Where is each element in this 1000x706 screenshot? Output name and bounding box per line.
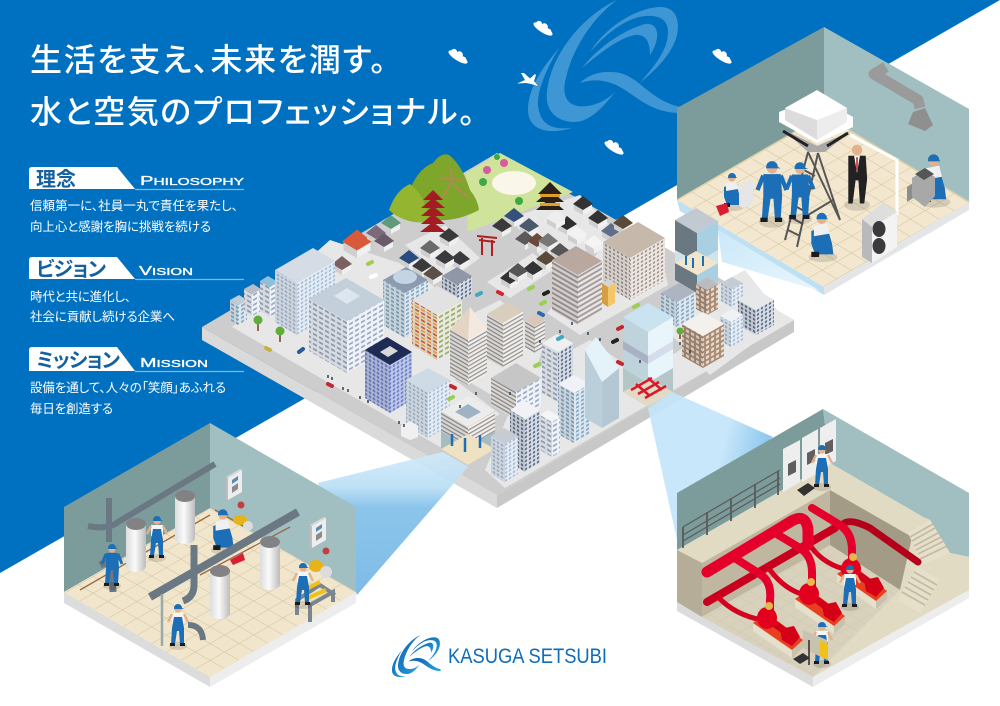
building with pump room cutaway: [623, 303, 673, 407]
panel: philosophy: 理念: [36, 168, 76, 191]
glass tower with open floor: [675, 208, 718, 293]
watermark: large Q logo: [528, 0, 680, 131]
front workers: [168, 563, 313, 650]
pit workers and electric panel: [793, 565, 860, 668]
upper switchboards and worker: [783, 419, 836, 496]
logo: Kasuga Setsubi: [392, 635, 607, 677]
panel: philosophy: P HILOSOPHY: [140, 173, 244, 188]
stairs: [898, 520, 950, 613]
isometric city: [202, 153, 794, 508]
rear pump: [233, 502, 253, 531]
panel: vision: ビジョン: [36, 258, 106, 281]
yellow pipe manifold: [297, 548, 335, 622]
panel: mission: M ISSION: [140, 355, 208, 370]
buildings middle row: [309, 278, 724, 385]
upper grey pipes: [88, 464, 215, 592]
panel: philosophy: 信頼第一に、社員一丸で責任を果たし、: [30, 198, 238, 213]
logo: Kasuga Setsubi: KASUGA SETSUBI: [448, 645, 607, 668]
panel: mission: 毎日を創造する: [30, 401, 113, 416]
rear workers: [102, 509, 237, 590]
title: [30, 42, 475, 130]
copper and grey service lines: [80, 510, 290, 590]
arrow: light beam to pump room: [648, 392, 773, 540]
pagodas: [420, 182, 564, 232]
buildings front row: [365, 334, 619, 443]
panel: mission: 設備を通して、人々の「笑顔」あふれる: [30, 380, 226, 395]
panel: philosophy: 向上心と感謝を胸に挑戦を続ける: [30, 219, 211, 234]
title: 生活を支え、未来を潤す。: [30, 42, 386, 78]
water tanks rear: [126, 490, 195, 572]
building with plant room cutaway: [401, 396, 495, 465]
panel: philosophy: [29, 167, 244, 234]
control panels: [226, 469, 326, 548]
panel: fire pump room: [677, 409, 969, 687]
icon: clouds and plane: [447, 18, 735, 157]
buildings back row: [230, 222, 665, 338]
pumps: [753, 553, 887, 658]
railing: [683, 470, 780, 548]
arrow: light beam to air-conditioning room: [677, 205, 820, 291]
front grey pipes: [150, 512, 298, 640]
panel: plumbing plant room: [64, 423, 356, 687]
service equipment: [716, 168, 935, 216]
wall duct: [874, 67, 933, 131]
white refrigerant pipe: [850, 135, 897, 215]
street cars, trees and pedestrians: [254, 262, 690, 427]
city platform: [202, 153, 794, 508]
red tool box: [230, 553, 245, 565]
outdoor unit: [862, 203, 897, 263]
hill and park: [389, 153, 573, 232]
panel: air-conditioning room: [677, 27, 969, 295]
room walls and floor: [64, 423, 356, 687]
low-rise houses: [332, 196, 633, 289]
workers and manager: [722, 145, 950, 262]
panel: mission: [29, 347, 244, 416]
panel: vision: V ISION: [139, 263, 193, 278]
room shell: [677, 409, 969, 687]
panel: vision: [29, 257, 244, 324]
room walls and floor: [677, 27, 969, 295]
ladder: [785, 152, 840, 247]
ceiling air conditioner: [779, 90, 853, 152]
torii gate: [477, 236, 497, 256]
title: 水と空気のプロフェッショナル。: [30, 94, 475, 130]
panel: vision: 社会に貢献し続ける企業へ: [30, 309, 175, 324]
arrow: light beam to plant room: [318, 452, 468, 595]
red pipework: [707, 508, 918, 620]
panel: vision: 時代と共に進化し、: [30, 290, 131, 304]
panel: mission: ミッション: [36, 350, 120, 372]
water tanks front: [210, 536, 280, 619]
